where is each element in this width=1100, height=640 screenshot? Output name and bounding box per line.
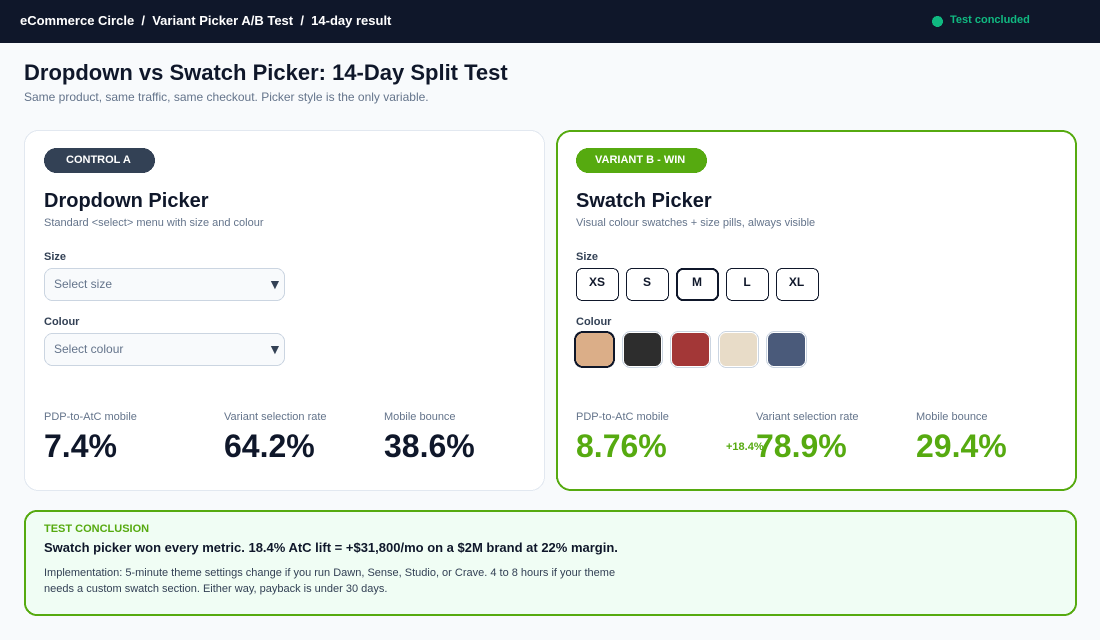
heading: dropdown picker: Dropdown Picker [44,190,209,212]
size pills: L [743,275,751,289]
conclusion label: TEST CONCLUSION [44,523,149,535]
dropdown: size: Select size [54,277,112,291]
label: size: Size [44,251,66,263]
description: Standard <select> menu with size and colour [44,217,264,229]
label: size: Size [576,251,598,263]
breadcrumb: eCommerce Circle / Variant Picker A/B Test / 14-day result [20,13,392,28]
metric: PDP-to-AtC: PDP-to-AtC mobile [576,411,669,423]
icon: dropdown arrow: ▼ [268,276,282,292]
metric: mobile bounce: Mobile bounce [384,411,456,423]
description: Visual colour swatches + size pills, always visible [576,217,815,229]
panel: variant B [557,131,1076,490]
conclusion body: Implementation: 5-minute theme settings change if you run Dawn, Sense, Studio, or Crave. 4 to 8 hours if your theme [44,567,615,579]
badge: control A [44,148,155,173]
size pills: M [692,275,702,289]
size pills: XS [589,275,605,289]
metric: mobile bounce [916,411,1007,464]
dropdown: colour [44,334,284,366]
badge: variant B win: VARIANT B - WIN [595,154,685,166]
badge: variant B win [576,148,707,173]
metric: PDP-to-AtC: 8.76% [576,428,667,464]
metric: PDP-to-AtC [576,411,669,464]
metric: PDP-to-AtC: PDP-to-AtC mobile [44,411,137,423]
metric: variant selection [756,411,859,464]
icon: dropdown arrow: ▼ [268,341,282,357]
panel: control A [24,130,544,490]
size pills [576,268,818,300]
status badge: test concluded: Test concluded [950,14,1030,26]
metric: variant selection: 64.2% [224,428,315,464]
metric: variant selection: Variant selection rate [756,411,859,423]
metric: PDP-to-AtC: 7.4% [44,428,117,464]
metric: PDP-to-AtC [44,411,137,464]
metric: mobile bounce: 38.6% [384,428,475,464]
badge: control A: CONTROL A [66,154,131,166]
panel: test conclusion [25,511,1076,615]
title: Dropdown vs Swatch Picker: 14-Day Split Test [24,60,508,85]
size pills: S [643,275,651,289]
conclusion body: needs a custom swatch section. Either way, payback is under 30 days. [44,583,387,595]
metric: mobile bounce: Mobile bounce [916,411,988,423]
dropdown: size [44,268,284,300]
lift note: +18.4%: +18.4% [726,441,764,453]
subtitle: Same product, same traffic, same checkout. Picker style is the only variable. [24,90,429,104]
metric: mobile bounce [384,411,475,464]
top bar [0,0,1100,43]
conclusion headline: Swatch picker won every metric. 18.4% AtC lift = +$31,800/mo on a $2M brand at 22% margin. [44,540,618,555]
heading: swatch picker: Swatch Picker [576,190,712,212]
label: colour: Colour [44,316,80,328]
metric: mobile bounce: 29.4% [916,428,1007,464]
colour swatches [575,332,806,368]
size pills: XL [789,275,804,289]
conclusion body [44,567,615,595]
dropdown: colour: Select colour [54,342,123,356]
metric: variant selection [224,411,327,464]
metric: variant selection: 78.9% [756,428,847,464]
metric: variant selection: Variant selection rate [224,411,327,423]
label: colour: Colour [576,316,612,328]
